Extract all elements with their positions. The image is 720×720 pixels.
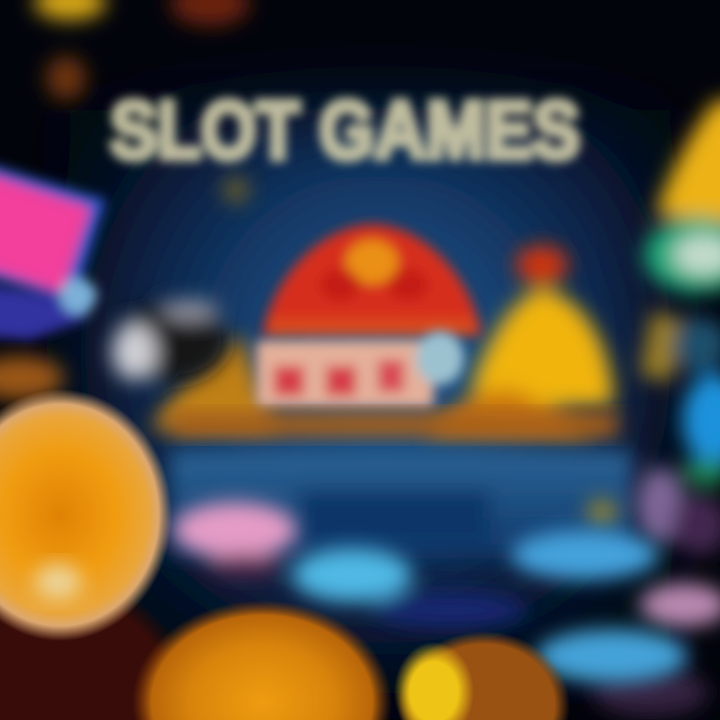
- left small orange pile: [0, 356, 64, 400]
- left gold pile: [150, 335, 275, 430]
- poker chips: [173, 502, 688, 683]
- bottom right gold coin: [394, 631, 570, 720]
- left pink card: [0, 155, 106, 340]
- big gold coin left: [0, 389, 172, 641]
- orange base band: [172, 412, 618, 438]
- title: SLOT GAMES: [110, 85, 580, 176]
- bottom gold dome: [132, 600, 392, 720]
- right side decorations: [587, 100, 720, 716]
- slot machine: [112, 224, 618, 440]
- bottom left dark pile: [0, 570, 200, 720]
- machine reels body: [256, 331, 464, 408]
- top floating coins: [34, 0, 250, 203]
- red dome: [262, 224, 482, 336]
- blue platform: [170, 450, 632, 555]
- right gold pile: [425, 245, 614, 440]
- black and white dice: [112, 300, 228, 382]
